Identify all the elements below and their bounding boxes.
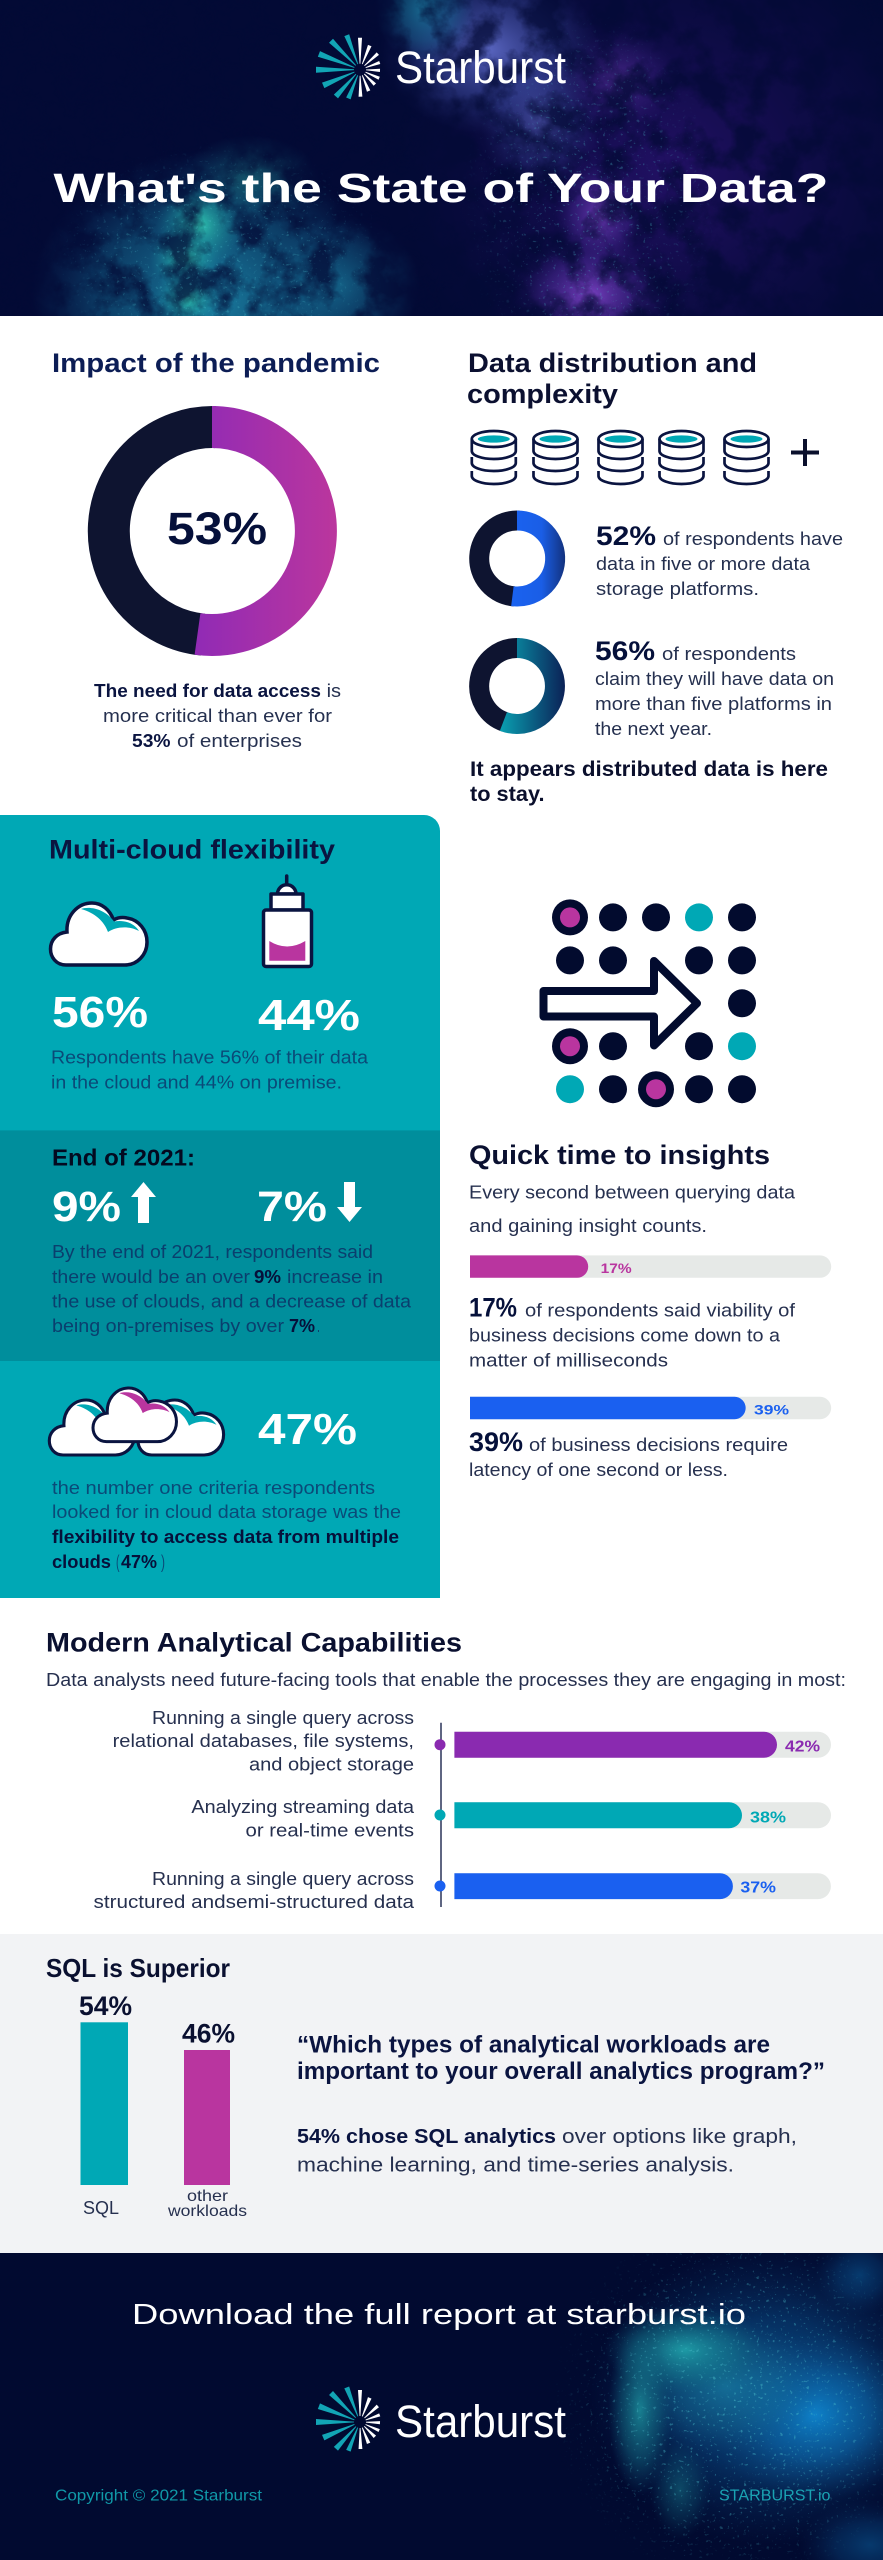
result text: 54% chose SQL analytics bbox=[297, 2126, 556, 2148]
bar chart: sql vs other: other bbox=[187, 2188, 229, 2205]
row: streaming data 38%: or real-time events bbox=[246, 1821, 414, 1841]
description: ( bbox=[116, 1552, 120, 1572]
conclusion bbox=[470, 758, 828, 806]
caption bbox=[94, 680, 341, 751]
panel background bbox=[0, 815, 440, 1598]
band: end of 2021 bbox=[0, 1130, 440, 1361]
quote: “Which types of analytical workloads are bbox=[297, 2032, 770, 2059]
intro: Every second between querying data bbox=[469, 1183, 796, 1203]
intro: Data analysts need future-facing tools that enable the processes they are engaging in most: bbox=[46, 1670, 846, 1690]
caption: is bbox=[327, 680, 341, 701]
quote: important to your overall analytics program?” bbox=[297, 2058, 825, 2085]
stat text: 52% bbox=[596, 521, 843, 599]
result text: over options like graph, bbox=[562, 2126, 797, 2148]
description bbox=[52, 1242, 412, 1336]
panel: modern analytical capabilities bbox=[46, 1628, 846, 1912]
description: increase in bbox=[287, 1267, 383, 1287]
icon: on-premise container bbox=[264, 876, 312, 966]
stat text: 17%: business decisions come down to a bbox=[469, 1326, 781, 1346]
stat text: 56%: claim they will have data on bbox=[595, 669, 834, 689]
conclusion: to stay. bbox=[470, 783, 544, 806]
row: query across databases 42% bbox=[113, 1708, 831, 1775]
description: the use of clouds, and a decrease of data bbox=[52, 1292, 412, 1312]
caption: of enterprises bbox=[177, 730, 302, 751]
call to action: Download the full report at starburst.io bbox=[132, 2299, 746, 2331]
heading bbox=[467, 348, 757, 409]
caption: The need for data access bbox=[94, 680, 321, 701]
axis line bbox=[440, 1723, 442, 1907]
heading: Impact of the pandemic bbox=[52, 348, 380, 378]
stat: 7%: 7% bbox=[257, 1183, 327, 1231]
stat text: 56%: of respondents bbox=[662, 644, 796, 664]
header banner bbox=[0, 0, 883, 316]
icon: cloud bbox=[50, 903, 147, 965]
bar: 17%: 17% bbox=[601, 1260, 632, 1276]
row: query across databases 42%: relational databases, file systems, bbox=[113, 1731, 414, 1751]
description bbox=[52, 1478, 401, 1572]
stat text: 17%: 17% bbox=[469, 1292, 517, 1322]
stat text: 39%: 39% bbox=[469, 1427, 523, 1457]
conclusion: It appears distributed data is here bbox=[470, 758, 828, 781]
description: . bbox=[317, 1316, 320, 1336]
arrow up bbox=[131, 1182, 156, 1223]
row: structured data 37% bbox=[94, 1869, 831, 1912]
bar chart: sql vs other: 46% bbox=[182, 2019, 235, 2049]
description bbox=[51, 1048, 369, 1093]
row: query across databases 42%: 42% bbox=[785, 1739, 820, 1756]
stat text: 39%: of business decisions require bbox=[529, 1435, 788, 1455]
icon: three clouds bbox=[49, 1388, 224, 1455]
row: streaming data 38%: Analyzing streaming data bbox=[191, 1797, 415, 1817]
row: structured data 37%: Running a single query across bbox=[152, 1869, 414, 1889]
row: streaming data 38% bbox=[191, 1797, 831, 1841]
stat text: 52%: storage platforms. bbox=[596, 579, 759, 599]
website link: STARBURST.io bbox=[719, 2488, 831, 2505]
row: structured data 37%: structured andsemi-structured data bbox=[94, 1892, 415, 1912]
stat text: 52%: data in five or more data bbox=[596, 554, 811, 574]
icon: databases row bbox=[472, 431, 819, 484]
description: Respondents have 56% of their data bbox=[51, 1048, 369, 1068]
panel: impact of the pandemic bbox=[52, 348, 380, 751]
description: in the cloud and 44% on premise. bbox=[51, 1073, 342, 1093]
caption: 53% bbox=[132, 730, 170, 751]
bar: 39% bbox=[470, 1397, 831, 1419]
row: query across databases 42%: Running a single query across bbox=[152, 1708, 414, 1728]
logo: Starburst bbox=[316, 34, 566, 99]
description: 47% bbox=[121, 1552, 157, 1572]
footer bbox=[0, 2235, 883, 2560]
stat: 44% on premise: 44% bbox=[258, 991, 360, 1040]
stat text: 39% bbox=[469, 1427, 788, 1480]
stat text: 56%: the next year. bbox=[595, 719, 712, 739]
description: clouds bbox=[52, 1552, 111, 1572]
stat text: 52%: 52% bbox=[596, 521, 656, 551]
title: What's the State of Your Data? bbox=[54, 165, 828, 211]
heading: complexity bbox=[467, 379, 618, 409]
heading: SQL is Superior bbox=[46, 1953, 230, 1983]
starburst icon bbox=[316, 34, 380, 99]
logo wordmark: Starburst bbox=[395, 2396, 566, 2447]
stat text: 17%: matter of milliseconds bbox=[469, 1350, 668, 1370]
description: 9% bbox=[254, 1267, 281, 1287]
caption: more critical than ever for bbox=[103, 705, 332, 726]
arrow down bbox=[337, 1182, 362, 1222]
description: 7% bbox=[289, 1316, 315, 1336]
description: there would be an over bbox=[52, 1267, 250, 1287]
heading: Data distribution and bbox=[468, 348, 757, 378]
description: By the end of 2021, respondents said bbox=[52, 1242, 373, 1262]
donut chart: 53% bbox=[109, 427, 316, 635]
panel: multi-cloud flexibility bbox=[0, 815, 440, 1598]
description: being on-premises by over bbox=[52, 1316, 284, 1336]
stat: 47%: 47% bbox=[258, 1405, 357, 1454]
stat: 56% cloud: 56% bbox=[52, 988, 148, 1037]
description: looked for in cloud data storage was the bbox=[52, 1502, 401, 1522]
stat text: 17%: of respondents said viability of bbox=[525, 1300, 796, 1320]
bar chart: sql vs other: workloads bbox=[167, 2203, 247, 2220]
stat text: 52%: of respondents have bbox=[663, 529, 843, 549]
stat text: 39%: latency of one second or less. bbox=[469, 1460, 728, 1480]
row: structured data 37%: 37% bbox=[740, 1880, 776, 1897]
bar chart: sql vs other bbox=[79, 1991, 247, 2220]
bar chart: sql vs other: SQL bbox=[83, 2198, 119, 2218]
panel: sql is superior bbox=[0, 1934, 883, 2253]
stat text: 56%: 56% bbox=[595, 636, 655, 666]
description: ) bbox=[161, 1552, 165, 1572]
icon: dots grid with arrow bbox=[544, 899, 756, 1107]
heading: Quick time to insights bbox=[469, 1140, 770, 1170]
donut: 56% bbox=[479, 648, 555, 724]
result text: machine learning, and time-series analysis. bbox=[297, 2155, 734, 2177]
intro bbox=[469, 1183, 796, 1236]
quote bbox=[297, 2032, 825, 2085]
description: flexibility to access data from multiple bbox=[52, 1527, 399, 1547]
band heading: End of 2021: bbox=[52, 1145, 195, 1171]
description: the number one criteria respondents bbox=[52, 1478, 375, 1498]
bar: 39%: 39% bbox=[754, 1402, 790, 1418]
panel background bbox=[0, 1934, 883, 2253]
row: streaming data 38%: 38% bbox=[750, 1810, 786, 1827]
stat text: 17% bbox=[469, 1292, 796, 1370]
starburst icon bbox=[316, 2387, 380, 2452]
heading: Multi-cloud flexibility bbox=[49, 834, 335, 864]
heading: Modern Analytical Capabilities bbox=[46, 1628, 462, 1658]
stat text: 56% bbox=[595, 636, 834, 739]
panel: quick time to insights bbox=[469, 899, 831, 1480]
donut chart: 53%: 53% bbox=[167, 503, 267, 554]
result text bbox=[297, 2126, 797, 2177]
logo: Starburst bbox=[316, 2387, 566, 2452]
intro: and gaining insight counts. bbox=[469, 1216, 707, 1236]
bar: 17% bbox=[470, 1255, 831, 1278]
stat text: 56%: more than five platforms in bbox=[595, 694, 832, 714]
panel: data distribution and complexity bbox=[467, 348, 843, 806]
donut: 52% bbox=[479, 520, 555, 596]
copyright: Copyright © 2021 Starburst bbox=[55, 2488, 263, 2505]
stat: 9%: 9% bbox=[52, 1183, 121, 1231]
bar chart: sql vs other: 54% bbox=[79, 1991, 132, 2021]
row: query across databases 42%: and object storage bbox=[249, 1755, 414, 1775]
logo wordmark: Starburst bbox=[395, 42, 566, 93]
